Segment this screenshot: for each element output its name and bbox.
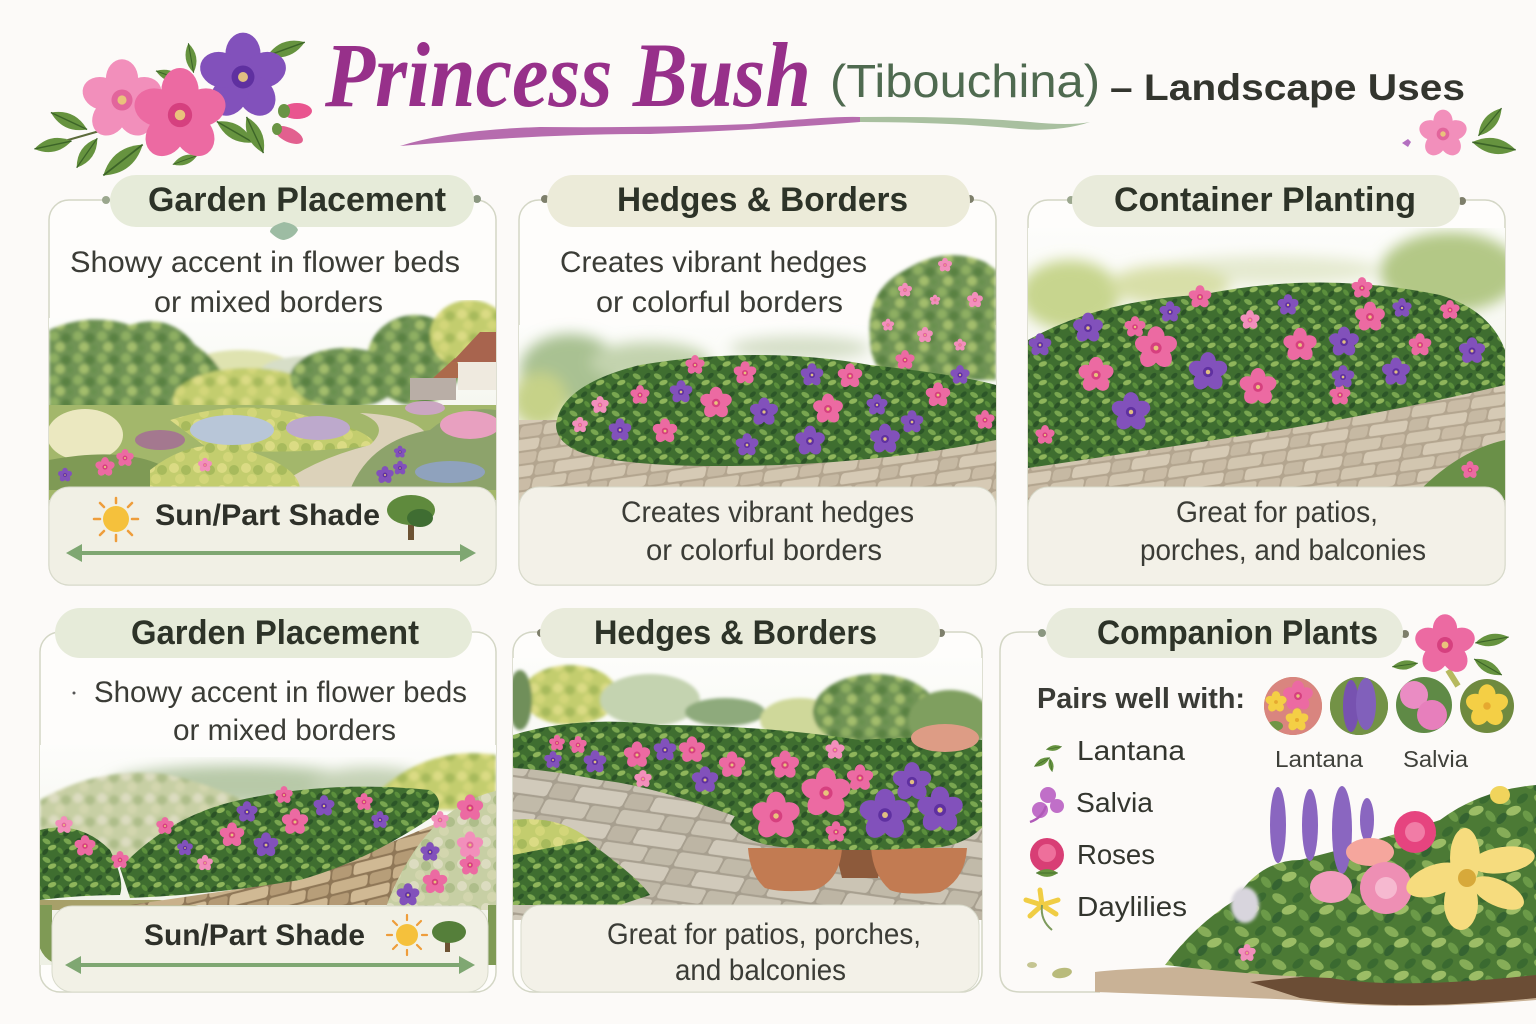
- caption: patios: Great for patios,: [1176, 496, 1378, 529]
- panel: garden placement top: [47, 200, 510, 585]
- heading: hedges and borders bottom: Hedges & Borders: [594, 614, 877, 652]
- scene: patio with pots: [508, 658, 992, 920]
- item: daylilies: [1026, 890, 1187, 930]
- text: showy accent bottom: or mixed borders: [173, 714, 396, 747]
- arrow: range: [65, 956, 475, 974]
- caption: hedges: [519, 487, 996, 585]
- panel: hedges and borders bottom: [508, 632, 992, 992]
- panel: hedges and borders top: [512, 200, 996, 585]
- heading: hedges and borders: [541, 175, 974, 227]
- heading: container planting: [1067, 175, 1466, 227]
- item: lantana: Lantana: [1077, 735, 1185, 766]
- arrow: range: [66, 544, 476, 562]
- panel: companion plants: [1000, 608, 1536, 1006]
- heading: container planting: Container Planting: [1114, 181, 1416, 219]
- text: creates vibrant hedges: [560, 246, 867, 319]
- text: creates vibrant hedges: Creates vibrant hedges: [560, 246, 867, 279]
- caption: sun/part shade: [52, 906, 488, 992]
- panel: garden placement bottom: [37, 632, 500, 992]
- caption: patios: [521, 905, 979, 992]
- text: creates vibrant hedges: or colorful borders: [596, 286, 843, 319]
- item: roses: Roses: [1077, 839, 1155, 870]
- illustration: companion planting bed: [1095, 785, 1536, 1006]
- text: showy accent top: [70, 246, 460, 319]
- item: salvia: Salvia: [1076, 787, 1153, 818]
- text: pairs well with: Pairs well with:: [1037, 683, 1245, 715]
- caption: patios: porches, and balconies: [1140, 534, 1426, 567]
- caption: patios: and balconies: [675, 954, 846, 987]
- caption: hedges: or colorful borders: [646, 534, 882, 567]
- heading: garden placement: Garden Placement: [148, 181, 446, 219]
- scene: flowered path: [37, 745, 500, 965]
- house: [410, 332, 496, 400]
- scene: garden path: [47, 300, 510, 500]
- heading: garden placement: [102, 175, 481, 240]
- item: daylilies: Daylilies: [1077, 891, 1187, 922]
- title: [324, 24, 1465, 146]
- icon: flower cluster, top left: [33, 33, 312, 182]
- icon: sun: [387, 915, 427, 955]
- caption: sun/part shade: Sun/Part Shade: [144, 919, 365, 952]
- heading: hedges and borders: Hedges & Borders: [617, 181, 908, 219]
- scene: hedge and paving: [1020, 228, 1520, 500]
- title: – Landscape Uses: [1110, 67, 1465, 108]
- thumbnails: companion plants: [1264, 677, 1514, 735]
- title: (Tibouchina): [830, 55, 1100, 107]
- icon: sun: [94, 498, 138, 541]
- panel: container planting: [1020, 200, 1520, 585]
- label: lantana thumbnail: Lantana: [1275, 746, 1363, 772]
- icon: tree: [432, 921, 466, 952]
- caption: hedges: Creates vibrant hedges: [621, 496, 914, 529]
- heading: companion plants: Companion Plants: [1097, 614, 1378, 652]
- heading: hedges and borders bottom: [537, 608, 945, 658]
- label: salvia thumbnail: Salvia: [1403, 746, 1468, 772]
- icon: tree: [387, 495, 435, 540]
- heading: garden placement bottom: Garden Placement: [131, 614, 419, 652]
- caption: patios: [1028, 487, 1505, 585]
- text: showy accent top: or mixed borders: [154, 286, 383, 319]
- text: showy accent top: Showy accent in flower beds: [70, 246, 460, 279]
- icon: small flower, top right: [1402, 104, 1517, 159]
- heading: garden placement bottom: [55, 608, 472, 658]
- icon: pink flower with leaves: [1391, 614, 1510, 686]
- scene: hedge: [512, 255, 996, 500]
- icon: terracotta pots: [730, 762, 992, 894]
- text: showy accent bottom: [72, 676, 467, 747]
- decoration: pebbles: [1027, 962, 1073, 980]
- text: showy accent bottom: Showy accent in flower beds: [94, 676, 467, 709]
- title: Princess Bush: [324, 24, 811, 126]
- item: salvia: [1030, 787, 1153, 822]
- item: lantana: [1033, 735, 1185, 772]
- caption: sun/part shade: [49, 487, 496, 585]
- heading: companion plants: [1038, 608, 1409, 658]
- caption: sun/part shade: Sun/Part Shade: [155, 499, 380, 532]
- item: roses: [1030, 838, 1155, 877]
- caption: patios: Great for patios, porches,: [607, 918, 921, 951]
